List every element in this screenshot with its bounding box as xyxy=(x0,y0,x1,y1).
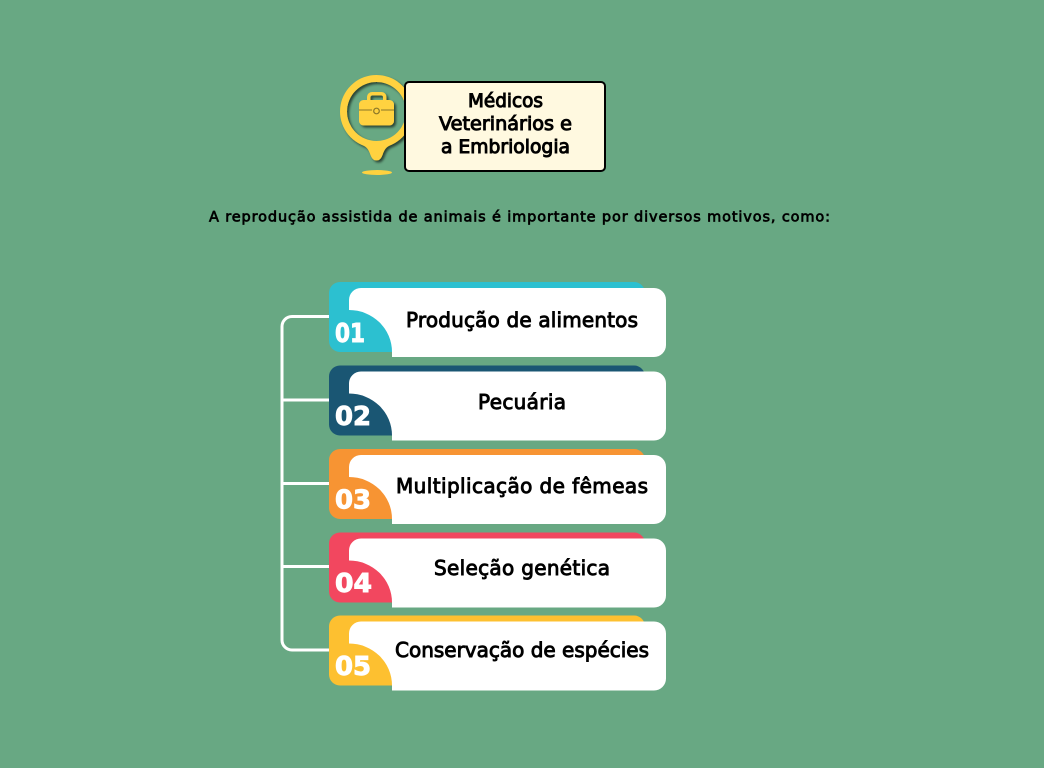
title text: Veterinários e xyxy=(439,113,572,135)
connector lines xyxy=(282,316,329,650)
item 01: Produção de alimentos xyxy=(406,308,638,332)
item 02 xyxy=(329,366,666,440)
intro sentence: A reprodução assistida de animais é importante por diversos motivos, como: xyxy=(209,210,830,226)
item 03: 03 xyxy=(335,486,371,516)
item 05: 05 xyxy=(335,652,371,682)
item 04 xyxy=(329,532,666,608)
item 01: 01 xyxy=(335,319,365,349)
title box xyxy=(405,82,605,171)
item 05 xyxy=(329,616,666,690)
item 01 xyxy=(329,282,666,357)
item 03 xyxy=(329,449,666,524)
item 05: Conservação de espécies xyxy=(395,638,649,662)
item 03: Multiplicação de fêmeas xyxy=(396,474,648,498)
item 02: Pecuária xyxy=(478,390,566,414)
item 04: Seleção genética xyxy=(434,556,610,580)
item 02: 02 xyxy=(335,402,371,432)
icon: map pin with briefcase xyxy=(340,75,413,175)
item 04: 04 xyxy=(335,569,372,599)
title text: a Embriologia xyxy=(441,136,570,158)
title text: Médicos xyxy=(468,90,543,112)
